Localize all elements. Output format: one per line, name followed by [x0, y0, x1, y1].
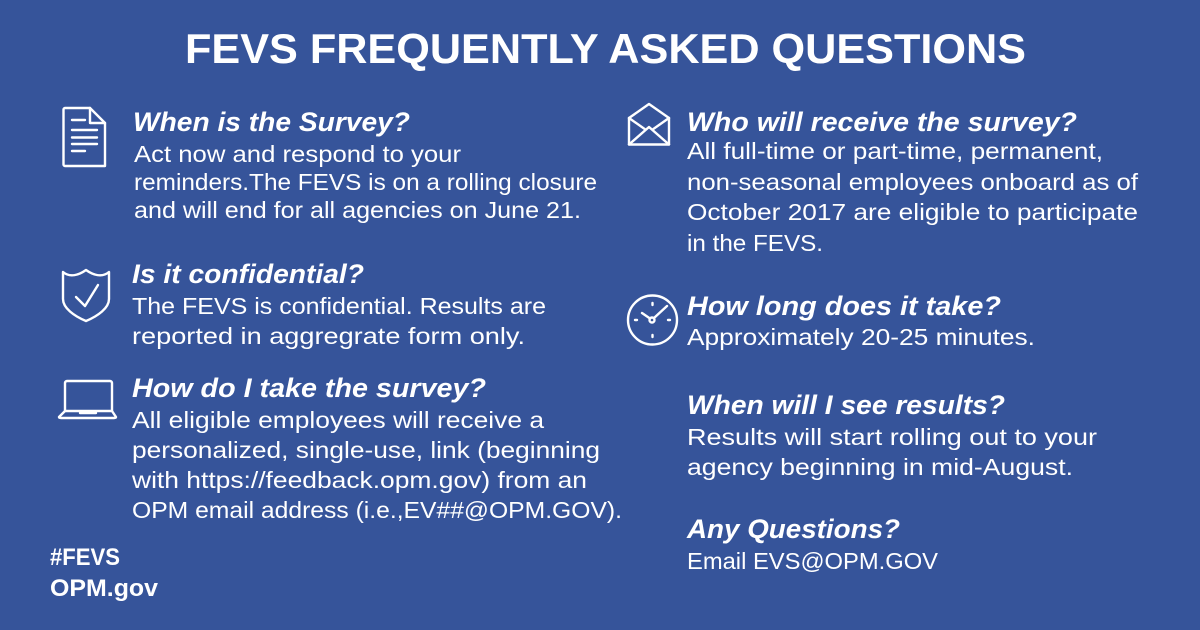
- text block: personalized, single-use, link (beginning: [132, 437, 600, 463]
- text block: reported in aggregrate form only.: [132, 323, 525, 349]
- text block: The FEVS is confidential. Results are: [132, 293, 546, 319]
- text block: [132, 293, 546, 349]
- icon: clock: [628, 296, 677, 344]
- text block: [134, 141, 597, 223]
- text block: [131, 407, 622, 523]
- text block: in the FEVS.: [687, 230, 823, 256]
- panel: when will I see results: [687, 390, 1097, 480]
- icon: open envelope: [629, 104, 669, 144]
- icon: document: [64, 108, 105, 166]
- panel: how do I take the survey: [59, 373, 622, 523]
- text block: [687, 138, 1139, 256]
- panel: who will receive the survey: [629, 104, 1139, 256]
- text block: All full-time or part-time, permanent,: [687, 138, 1103, 164]
- panel: how long does it take: [628, 291, 1035, 350]
- text block: and will end for all agencies on June 21.: [134, 197, 581, 223]
- text block: Results will start rolling out to your: [687, 424, 1097, 450]
- heading: Is it confidential?: [132, 259, 364, 289]
- hashtag and website: [50, 544, 158, 602]
- heading: When will I see results?: [687, 390, 1005, 420]
- hashtag and website: OPM.gov: [50, 575, 158, 602]
- text block: All eligible employees will receive a: [132, 407, 545, 433]
- icon: laptop: [59, 381, 116, 418]
- text block: [687, 424, 1097, 480]
- text block: October 2017 are eligible to participate: [687, 199, 1138, 225]
- text block: OPM email address (i.e.,EV##@OPM.GOV).: [132, 497, 622, 523]
- text block: with https://feedback.opm.gov) from an: [131, 467, 587, 493]
- text block: non-seasonal employees onboard as of: [687, 169, 1139, 195]
- text block: Act now and respond to your: [134, 141, 461, 167]
- icon: shield with check: [63, 270, 109, 321]
- heading: How long does it take?: [687, 291, 1001, 321]
- heading: Any Questions?: [686, 514, 900, 544]
- heading: When is the Survey?: [133, 107, 410, 137]
- heading: How do I take the survey?: [132, 373, 486, 403]
- panel: is it confidential: [63, 259, 546, 349]
- text block: Approximately 20-25 minutes.: [687, 324, 1035, 350]
- panel: when is the survey: [64, 107, 597, 223]
- hashtag and website: #FEVS: [50, 544, 120, 571]
- title: FEVS FREQUENTLY ASKED QUESTIONS: [185, 25, 1026, 72]
- text block: reminders.The FEVS is on a rolling closure: [134, 169, 597, 195]
- text block: Email EVS@OPM.GOV: [687, 548, 938, 574]
- panel: any questions: [686, 514, 938, 574]
- text block: agency beginning in mid-August.: [687, 454, 1073, 480]
- heading: Who will receive the survey?: [687, 107, 1077, 137]
